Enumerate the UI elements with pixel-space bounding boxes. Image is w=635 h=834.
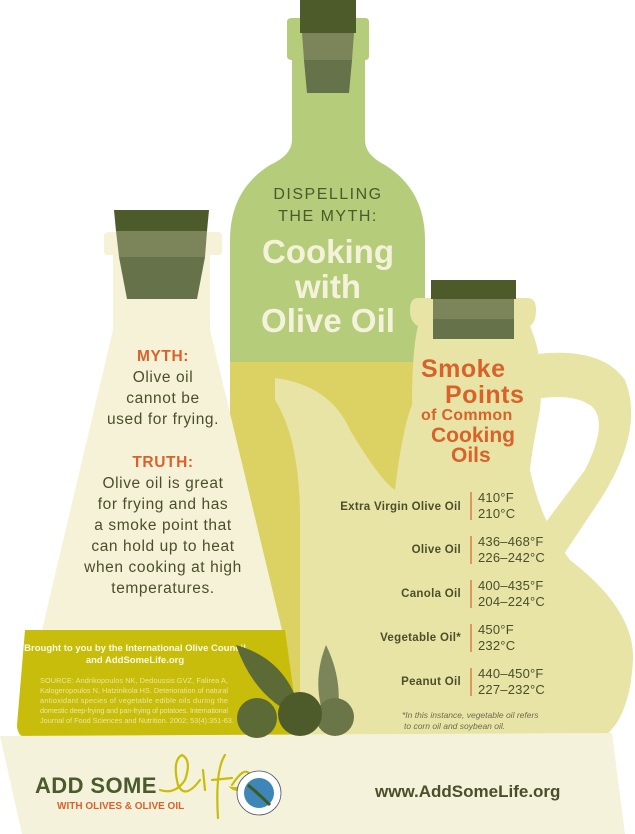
myth and truth text: MYTH: <box>137 348 189 365</box>
website url: www.AddSomeLife.org <box>374 782 560 801</box>
smoke points heading: Oils <box>451 444 491 467</box>
myth and truth text <box>83 348 242 597</box>
smoke points heading <box>421 355 524 467</box>
myth and truth text: Olive oil <box>133 369 193 386</box>
smoke point table <box>340 490 545 697</box>
source band: antioxidant species of vegetable edible oils during the <box>40 696 228 705</box>
source band: and AddSomeLife.org <box>86 655 184 666</box>
title: Cooking <box>262 233 394 270</box>
flask cork <box>114 210 209 299</box>
source band: Journal of Food Sciences and Nutrition. 2002; 53(4):351-63. <box>40 716 234 725</box>
smoke point table: Vegetable Oil* <box>380 632 461 644</box>
big bottle <box>230 0 425 740</box>
smoke point table: 204–224°C <box>478 594 545 609</box>
smoke point table: 400–435°F <box>478 578 544 593</box>
title: Olive Oil <box>261 302 395 339</box>
myth and truth text: a smoke point that <box>94 517 232 534</box>
add some life logo <box>35 755 265 818</box>
title: THE MYTH: <box>278 208 378 225</box>
myth and truth text: when cooking at high <box>83 559 242 576</box>
smoke point table: 226–242°C <box>478 550 545 565</box>
jug <box>275 280 633 740</box>
smoke point table: Extra Virgin Olive Oil <box>340 501 461 513</box>
smoke point table: 227–232°C <box>478 682 545 697</box>
title <box>261 186 395 339</box>
jug body <box>300 298 633 740</box>
myth and truth text: Olive oil is great <box>102 475 224 492</box>
bottom banner <box>0 733 625 834</box>
smoke point table: 440–450°F <box>478 666 544 681</box>
source band <box>17 630 300 738</box>
myth and truth text: for frying and has <box>98 496 228 513</box>
smoke points heading: Points <box>445 381 524 409</box>
jug spout <box>275 378 400 740</box>
source band: domestic deep-frying and pan-frying of potatoes. International <box>40 706 228 715</box>
source band: Kalogeropoulos N, Hatzinikola HS. Deterioration of natural <box>40 686 228 695</box>
footnote: to corn oil and soybean oil. <box>404 721 505 731</box>
jug cork <box>431 280 516 339</box>
council logo <box>237 771 281 815</box>
smoke points heading: Cooking <box>431 424 515 447</box>
source band: SOURCE: Andrikopoulos NK, Dedoussis GVZ, Falirea A, <box>40 676 228 685</box>
smoke point table: 436–468°F <box>478 534 544 549</box>
footnote <box>402 710 539 731</box>
flask <box>42 210 282 630</box>
smoke point table: Peanut Oil <box>401 676 461 688</box>
smoke point table: Canola Oil <box>401 588 461 600</box>
smoke point table: 410°F <box>478 490 514 505</box>
bottle cork <box>300 0 356 93</box>
add some life logo: WITH OLIVES & OLIVE OIL <box>57 801 184 812</box>
smoke point table: 210°C <box>478 506 515 521</box>
olives icon <box>236 645 354 738</box>
title: with <box>294 268 361 305</box>
myth and truth text: cannot be <box>126 390 200 407</box>
footnote: *In this instance, vegetable oil refers <box>402 710 539 720</box>
jug handle <box>530 353 631 560</box>
smoke points heading: Smoke <box>421 355 505 383</box>
myth and truth text: can hold up to heat <box>91 538 235 555</box>
smoke point table: 450°F <box>478 622 514 637</box>
source band: Brought to you by the International Olive Council <box>24 643 246 654</box>
add some life logo: ADD SOME <box>35 773 157 798</box>
title: DISPELLING <box>273 186 383 203</box>
myth and truth text: used for frying. <box>107 411 219 428</box>
myth and truth text: temperatures. <box>111 580 215 597</box>
smoke point table: 232°C <box>478 638 515 653</box>
myth and truth text: TRUTH: <box>132 454 194 471</box>
smoke point table: Olive Oil <box>412 544 461 556</box>
smoke points heading: of Common <box>421 407 513 424</box>
